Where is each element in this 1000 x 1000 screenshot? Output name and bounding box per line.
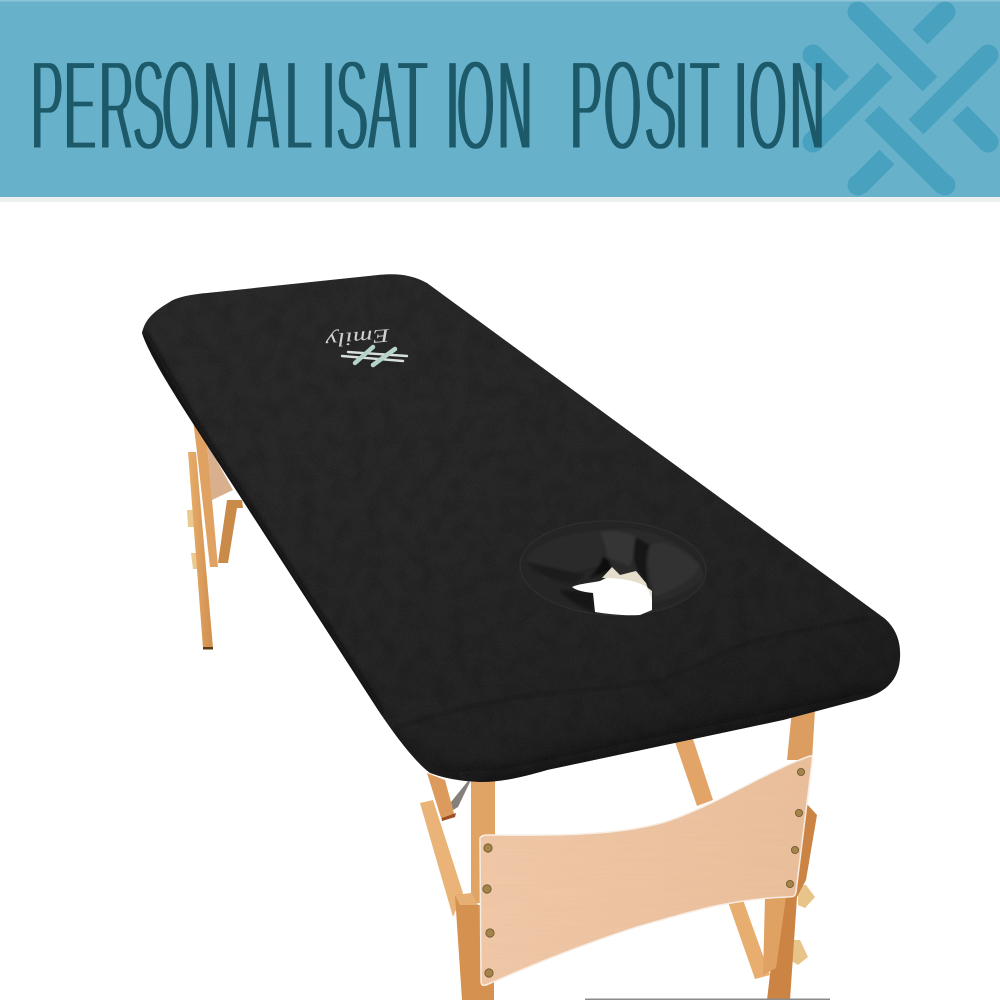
face hole (518, 518, 708, 618)
near left folding strut (420, 773, 470, 917)
floor shadow line (585, 998, 830, 1000)
back right strut (675, 739, 713, 806)
header band (0, 0, 1000, 202)
title: PERSONALISATION POSITION (31, 32, 825, 178)
massage table photo (130, 270, 910, 1000)
black towelling cover (130, 270, 910, 800)
embroidered weave mark (342, 347, 407, 365)
wooden brace panel (478, 750, 818, 990)
header weave logo (802, 2, 998, 196)
far-end left leg (187, 420, 243, 650)
near left post (455, 778, 495, 1000)
embroidered name: Emily (324, 324, 392, 351)
lower back strut (728, 900, 770, 979)
embroidered logo (324, 324, 407, 365)
near right post (763, 710, 817, 1000)
